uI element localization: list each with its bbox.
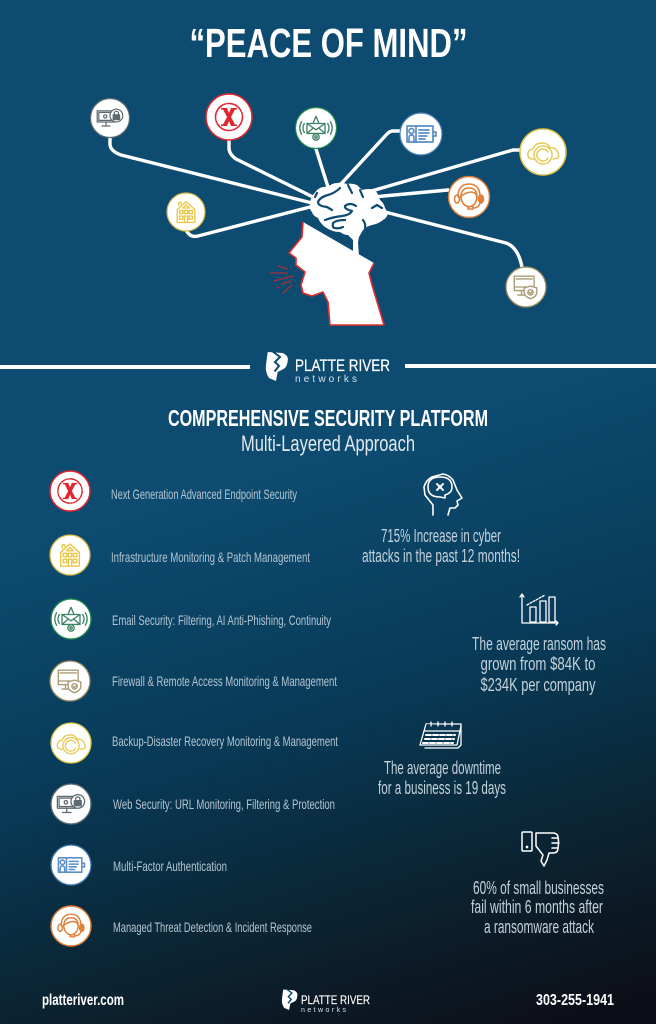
icon: threat response node	[448, 176, 490, 218]
logo: PLATTE RIVER	[295, 356, 390, 375]
head silhouette	[289, 222, 384, 325]
brain	[310, 183, 388, 257]
list item: infrastructure	[50, 535, 310, 575]
list item: multi-factor	[51, 845, 227, 885]
list item: web: Web Security: URL Monitoring, Filtering & Protection	[113, 796, 335, 812]
icon: calendar	[420, 722, 461, 748]
list item: endpoint: Next Generation Advanced Endpoint Security	[111, 486, 297, 502]
list item: endpoint	[50, 471, 297, 511]
icon: backup cloud node	[520, 129, 566, 175]
icon: firewall node	[506, 267, 546, 307]
icon: web security node	[90, 98, 130, 138]
brain and head illustration	[110, 131, 522, 325]
icon: head with x	[424, 474, 462, 515]
stat: business failure	[471, 832, 604, 937]
list item: backup: Backup-Disaster Recovery Monitoring & Management	[112, 733, 338, 749]
icon: email security node	[296, 108, 336, 148]
heading: COMPREHENSIVE SECURITY PLATFORM	[168, 405, 488, 431]
list item: firewall: Firewall & Remote Access Monitoring & Management	[112, 673, 337, 689]
list item: multi-factor: Multi-Factor Authentication	[113, 858, 227, 874]
footer website: platteriver.com	[42, 992, 124, 1009]
footer phone: 303-255-1941	[536, 992, 614, 1009]
stat: downtime: for a business is 19 days	[378, 778, 506, 798]
title: “PEACE OF MIND”	[190, 20, 468, 66]
icon: endpoint security node	[206, 94, 252, 140]
list item: threat response: Managed Threat Detection & Incident Response	[113, 919, 312, 935]
connector lines	[110, 131, 522, 267]
footer logo: networks	[301, 1007, 346, 1014]
list item: email	[51, 599, 331, 639]
icon: infrastructure node	[167, 193, 205, 231]
list item: firewall	[50, 661, 337, 701]
divider right	[405, 364, 656, 368]
icon: multi-factor node	[400, 113, 442, 155]
list item: threat response	[51, 906, 312, 946]
divider left	[0, 365, 250, 369]
icon: thumbs down	[522, 832, 559, 866]
footer logo: PLATTE RIVER	[301, 993, 370, 1007]
subheading: Multi-Layered Approach	[241, 431, 415, 456]
logo: networks	[295, 374, 357, 385]
list item: email: Email Security: Filtering, AI Anti-Phishing, Continuity	[112, 612, 331, 628]
stat: ransom: $234K per company	[480, 675, 596, 695]
list item: web	[51, 784, 335, 824]
list item: backup	[51, 723, 338, 763]
speech sparks	[270, 266, 293, 293]
stat text: 715% Increase in cyber	[381, 526, 501, 546]
stat text: The average downtime	[384, 758, 501, 778]
footer logo	[282, 989, 370, 1014]
list: security layers	[50, 471, 338, 946]
stat: ransom: grown from $84K to	[480, 654, 596, 674]
list item: infrastructure: Infrastructure Monitoring & Patch Management	[111, 549, 310, 565]
icon: bar chart	[520, 594, 558, 625]
stat: business failure: a ransomware attack	[484, 917, 595, 937]
logo	[266, 352, 390, 385]
stat: cyber attacks	[362, 474, 520, 566]
stat: ransom	[472, 594, 606, 695]
stat: cyber attacks: attacks in the past 12 months!	[362, 546, 520, 566]
stat: downtime	[378, 722, 506, 798]
